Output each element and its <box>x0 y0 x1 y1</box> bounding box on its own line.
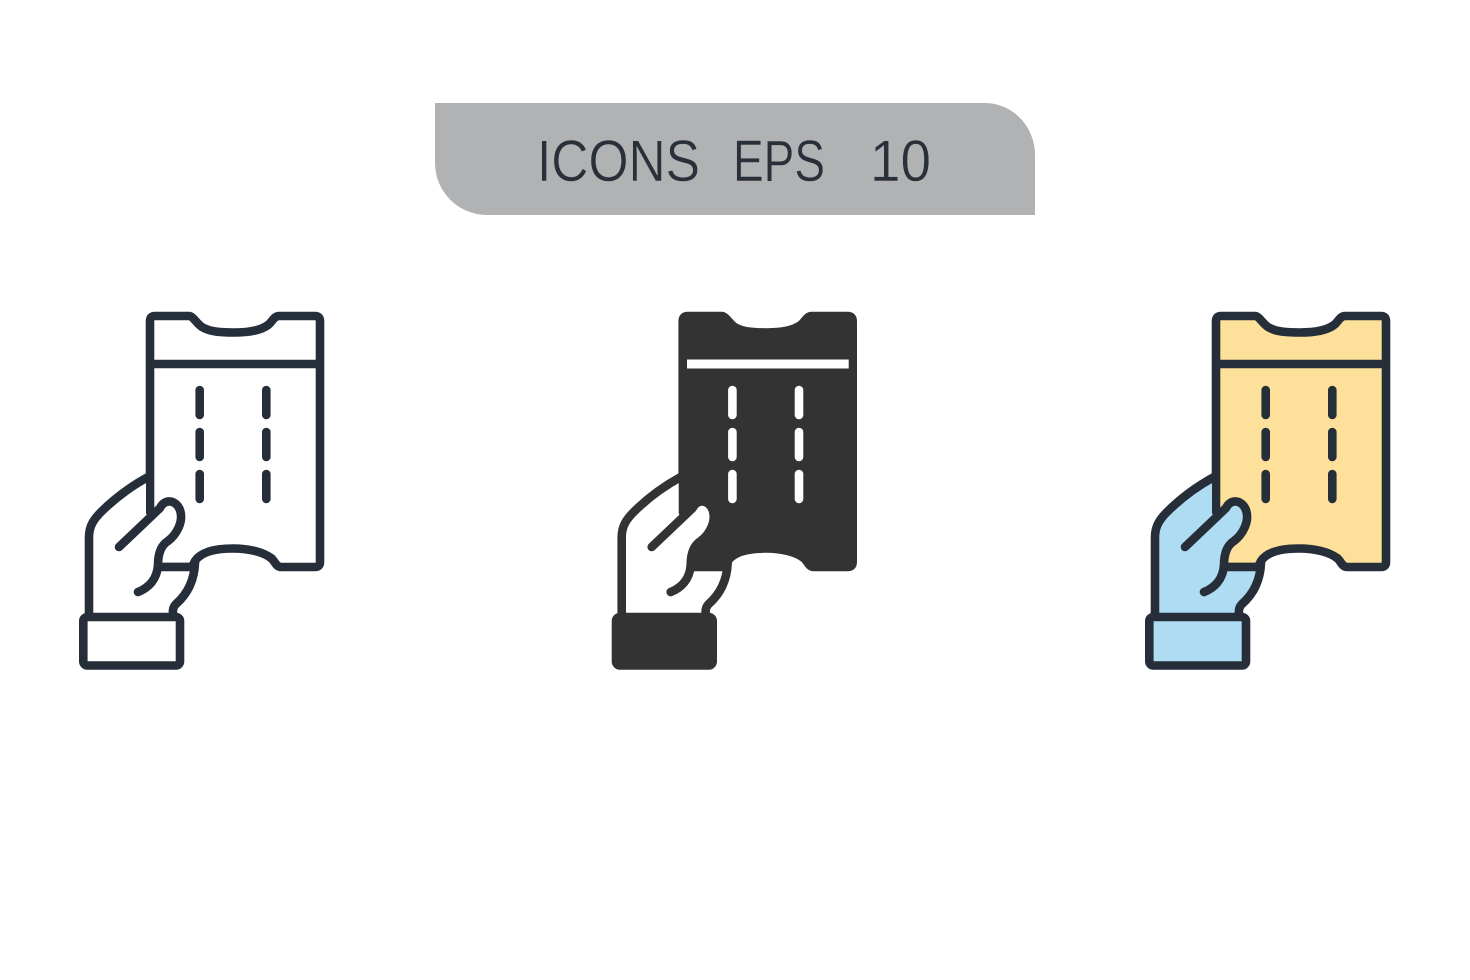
ticket dashes <box>1266 390 1332 499</box>
banner title text <box>537 129 931 194</box>
ticket divider <box>687 360 849 368</box>
icon: solid hand holding ticket <box>616 316 853 666</box>
ticket <box>150 316 320 567</box>
ticket divider <box>150 360 320 368</box>
ticket divider <box>1216 360 1386 368</box>
cuff <box>83 617 180 666</box>
hand <box>622 477 728 617</box>
ticket dashes <box>200 390 266 499</box>
ticket dashes <box>732 390 799 499</box>
cuff <box>616 617 713 666</box>
banner title text: EPS <box>733 129 825 194</box>
ticket <box>1216 316 1386 567</box>
title banner <box>435 103 1035 215</box>
hand <box>89 477 195 617</box>
icon: outline hand holding ticket <box>83 316 320 666</box>
ticket <box>683 316 853 567</box>
banner title text: ICONS <box>537 129 700 194</box>
banner title text: 10 <box>870 129 931 194</box>
banner shape <box>435 103 1035 215</box>
hand <box>1155 477 1261 617</box>
icon: coloured hand holding ticket <box>1149 316 1386 666</box>
cuff <box>1149 617 1246 666</box>
